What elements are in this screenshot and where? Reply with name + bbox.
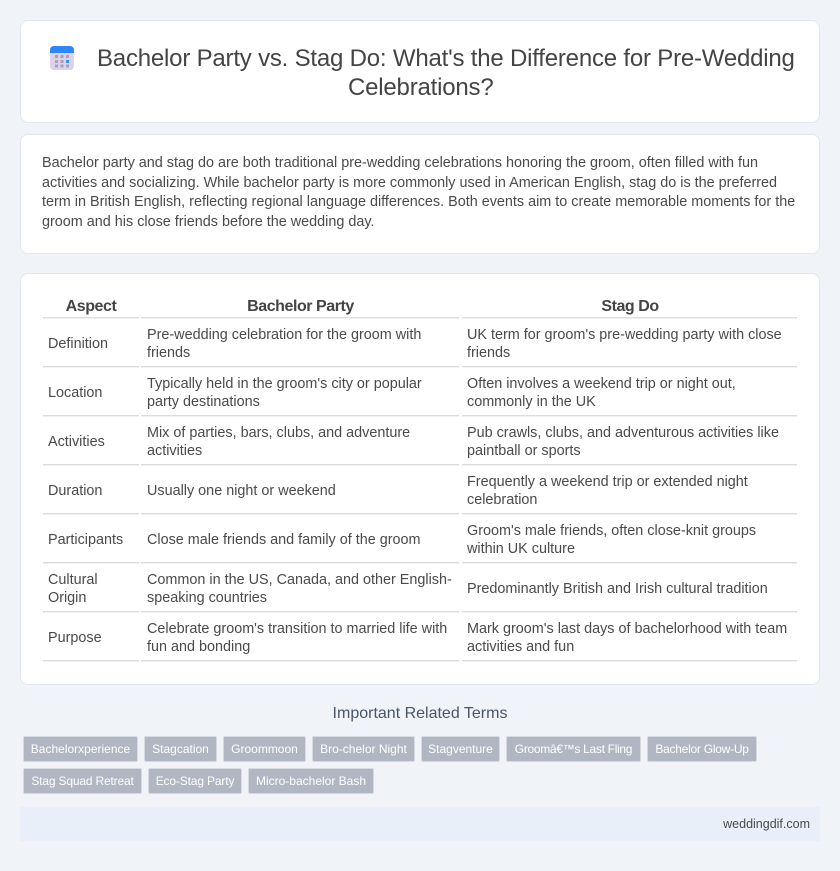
tag: Micro-bachelor Bash: [256, 774, 366, 788]
Purpose, stag do: [467, 621, 787, 655]
Duration, bachelor party: Usually one night or weekend: [147, 483, 336, 499]
Participants, stag do: Groom's male friends, often close-knit groups: [467, 523, 756, 539]
Location, bachelor party: [147, 376, 422, 410]
Activities, stag do: [467, 425, 779, 459]
Purpose, bachelor party: Celebrate groom's transition to married life with: [147, 621, 447, 637]
row: Cultural Origin: Cultural: [48, 572, 98, 588]
Activities, stag do: paintball or sports: [467, 443, 581, 459]
Activities, bachelor party: activities: [147, 443, 202, 459]
tag: Bachelorxperience: [31, 742, 130, 756]
footer bar: [20, 807, 820, 841]
title: Bachelor Party vs. Stag Do: What's the Difference for Pre-Wedding: [97, 45, 795, 72]
intro text: groom and his close friends before the wedding day.: [42, 214, 375, 230]
Location, stag do: commonly in the UK: [467, 394, 596, 410]
Duration, stag do: Frequently a weekend trip or extended night: [467, 474, 748, 490]
Purpose, bachelor party: fun and bonding: [147, 639, 250, 655]
tag: [148, 768, 242, 794]
Location, bachelor party: party destinations: [147, 394, 260, 410]
table header: Aspect: Aspect: [66, 298, 116, 315]
row: Duration: Duration: [48, 483, 102, 499]
row: Definition: Definition: [48, 336, 108, 352]
tag: [248, 768, 374, 794]
Cultural Origin, stag do: Predominantly British and Irish cultural tradition: [467, 581, 768, 597]
Purpose, stag do: activities and fun: [467, 639, 574, 655]
Definition, stag do: [467, 327, 782, 361]
header card: [20, 20, 820, 123]
icon: calendar: [50, 46, 74, 70]
footer text: weddingdif.com: [723, 817, 810, 831]
Definition, bachelor party: Pre-wedding celebration for the groom with: [147, 327, 421, 343]
intro card: [20, 134, 820, 254]
Activities, bachelor party: [147, 425, 410, 459]
tag: [23, 768, 142, 794]
row: Cultural Origin: [48, 572, 98, 606]
tag: Groomâ€™s Last Fling: [515, 742, 632, 756]
Cultural Origin, bachelor party: Common in the US, Canada, and other English-: [147, 572, 452, 588]
Location, bachelor party: Typically held in the groom's city or popular: [147, 376, 422, 392]
Participants, bachelor party: Close male friends and family of the groom: [147, 532, 421, 548]
Location, stag do: Often involves a weekend trip or night out,: [467, 376, 736, 392]
tag: Groommoon: [231, 742, 298, 756]
Purpose, bachelor party: [147, 621, 447, 655]
tag: Eco-Stag Party: [156, 774, 234, 788]
row: Cultural Origin: Origin: [48, 590, 86, 606]
table header: Bachelor Party: Bachelor Party: [247, 298, 354, 315]
tag: Bro-chelor Night: [320, 742, 407, 756]
intro text: activities and socializing. While bachelor party is more commonly used in American English, stag do is the preferred: [42, 175, 777, 191]
table header: Stag Do: Stag Do: [601, 298, 659, 315]
table card: [20, 273, 820, 685]
comparison table: [43, 298, 797, 662]
Cultural Origin, bachelor party: [147, 572, 452, 606]
Activities, stag do: Pub crawls, clubs, and adventurous activities like: [467, 425, 779, 441]
tag: Bachelor Glow-Up: [655, 742, 749, 756]
tag: Stagventure: [428, 742, 493, 756]
Duration, stag do: celebration: [467, 492, 537, 508]
Location, stag do: [467, 376, 736, 410]
Activities, bachelor party: Mix of parties, bars, clubs, and adventure: [147, 425, 410, 441]
tag: Stag Squad Retreat: [31, 774, 134, 788]
row: Location: Location: [48, 385, 102, 401]
tag: [23, 736, 138, 762]
heading: related terms: Important Related Terms: [333, 705, 507, 722]
Definition, stag do: friends: [467, 345, 510, 361]
tag: [223, 736, 306, 762]
row: Activities: Activities: [48, 434, 105, 450]
tag: [312, 736, 415, 762]
tag: [144, 736, 217, 762]
row: Participants: Participants: [48, 532, 123, 548]
title: [97, 45, 795, 101]
Definition, bachelor party: [147, 327, 421, 361]
intro text: [42, 155, 795, 230]
tag: [421, 736, 500, 762]
tag: [506, 736, 641, 762]
Purpose, stag do: Mark groom's last days of bachelorhood with team: [467, 621, 787, 637]
intro text: Bachelor party and stag do are both traditional pre-wedding celebrations honoring the groom, often filled with fun: [42, 155, 758, 171]
title: Celebrations?: [348, 74, 494, 101]
Duration, stag do: [467, 474, 748, 508]
Definition, stag do: UK term for groom's pre-wedding party with close: [467, 327, 782, 343]
tag: [647, 736, 757, 762]
Participants, stag do: within UK culture: [467, 541, 575, 557]
Definition, bachelor party: friends: [147, 345, 190, 361]
Cultural Origin, bachelor party: speaking countries: [147, 590, 267, 606]
intro text: term in British English, reflecting regional language differences. Both events aim to create memorable moments for the: [42, 194, 795, 210]
Participants, stag do: [467, 523, 756, 557]
tag: Stagcation: [152, 742, 209, 756]
row: Purpose: Purpose: [48, 630, 102, 646]
